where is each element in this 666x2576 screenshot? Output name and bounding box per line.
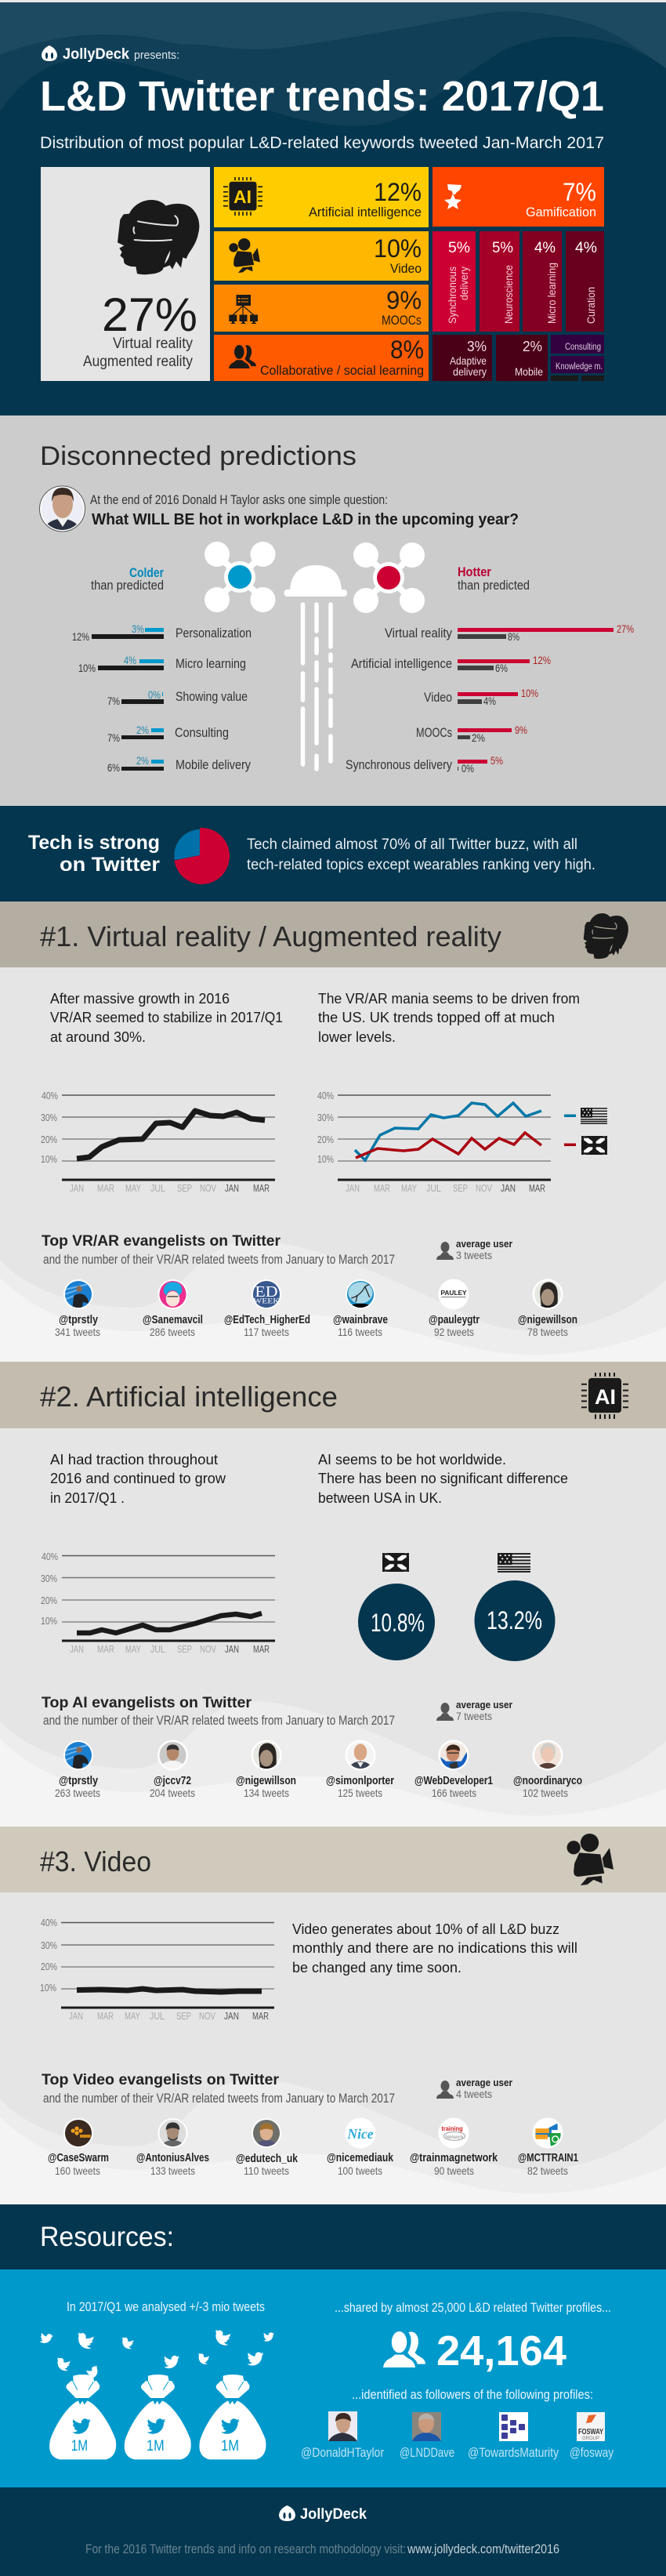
tile: knowledge management: Knowledge m. [556,362,603,372]
evangelist row: @pauleygtr [429,1314,480,1326]
tile: consulting: Consulting [565,343,601,352]
tile: curation 4% [566,231,604,332]
line chart: AI overall: 40% [42,1551,58,1562]
evangelist row: 117 tweets [244,1326,289,1338]
evangelist row: 92 tweets [434,1326,474,1338]
row: synchronous delivery: Synchronous delivery [346,757,452,772]
evangelist row: @noordinaryco [513,1775,582,1787]
line chart: video overall: MAY [125,2010,140,2022]
evangelist row: 78 tweets [527,1326,568,1338]
row: showing value: Showing value [176,689,248,704]
bag two [125,2375,191,2459]
line chart: VR/AR US vs UK: JUL [426,1182,441,1194]
line chart: VR/AR overall: 20% [41,1134,57,1145]
line chart: VR/AR overall: MAY [125,1182,141,1194]
text: video note: be changed any time soon. [292,1959,461,1976]
evangelist row: @nigewillson [518,1314,577,1326]
tile: gamification 7%: 7% [563,178,596,206]
heading: top AI evangelists: Top AI evangelists on Twitter [42,1695,252,1711]
row: showing value: 7% [107,695,120,707]
line chart: VR/AR overall: 40% [42,1090,58,1101]
icon: flying twitter birds [39,2329,274,2379]
row: micro learning: Micro learning [176,656,246,671]
line chart: video overall: NOV [199,2010,215,2022]
line chart: video overall: MAR [252,2010,269,2022]
row: micro learning: 10% [78,662,96,674]
bubble: US 13.2% [475,1580,555,1661]
bag two: 1M [147,2438,165,2454]
row: mobile delivery: 2% [136,755,149,767]
bubble: UK 10.8%: 10.8% [371,1609,425,1637]
key question: What WILL BE hot in workplace L&D in the upcoming year? [92,510,519,528]
line chart: AI overall: NOV [200,1643,216,1655]
tile: synchronous delivery 5%: Synchronous [446,267,458,324]
profile: LNDDave [400,2412,454,2460]
icon: cloud dome with rain [284,565,347,769]
evangelist row: 134 tweets [244,1787,289,1799]
row: consulting [107,724,229,744]
bag one: 1M [71,2438,88,2454]
row: personalization [72,623,252,643]
subtitle: Distribution of most popular L&D-related keywords tweeted Jan-March 2017 [40,134,604,152]
section header band: #2. Artificial intelligence [40,1381,338,1413]
row: artificial intelligence: 12% [533,655,551,666]
evangelist row: @edutech_uk [236,2153,299,2165]
evangelist row: 263 tweets [55,1787,100,1799]
text: worldwide note: There has been no significant difference [318,1470,568,1486]
text: growth note: VR/AR seemed to stabilize in 2017/Q1 [50,1009,283,1025]
bubble: UK 10.8% [358,1584,435,1660]
row: synchronous delivery [346,755,503,775]
subheading: and the number of their VR/AR related tweets from January to March 2017 [43,1714,395,1728]
tile: collaborative / social learning 8%: 8% [390,336,424,364]
line chart: AI overall: JUL [150,1643,165,1655]
tile: adaptive delivery 3% [433,335,492,381]
tile: mobile 2%: Mobile [515,366,543,378]
tile: collaborative / social learning 8% [214,335,429,381]
row: consulting: 2% [136,724,149,736]
logo: JollyDeck presents: presents: [134,49,179,62]
evangelist row: @MCTTRAIN1 [518,2152,578,2164]
tile: virtual reality 27% [41,167,210,381]
text: growth note: After massive growth in 2016 [50,990,230,1007]
text: identified followers: ...identified as followers of the following profiles: [352,2387,593,2402]
tile: virtual reality 27%: Virtual reality [113,336,193,352]
tile: MOOCs 9% [214,285,429,332]
evangelist row: @nigewillson [236,1775,296,1787]
tile: knowledge management [551,356,604,373]
line chart: video overall: 10% [40,1983,56,1994]
text: growth note: at around 30%. [50,1029,146,1045]
row: mobile delivery [107,755,251,774]
legend: colder: Colder [129,565,164,580]
tile: mobile 2% [496,335,548,381]
evangelist row: @jccv72 [154,1775,191,1787]
section header band: AI [595,1385,616,1409]
text: US driven note [318,990,580,1045]
callout: average user: 4 tweets [456,2088,492,2100]
row: video: 4% [483,695,496,707]
callout: average user: 3 tweets [456,1250,492,1261]
tile: consulting [551,335,604,354]
evangelist row: 204 tweets [150,1787,195,1799]
row: personalization: 12% [72,631,89,643]
row: virtual reality: Virtual reality [385,626,452,640]
bag three [199,2375,266,2459]
row: personalization: Personalization [176,626,252,640]
row: micro learning [78,655,246,674]
text: methodology link: For the 2016 Twitter trends and info on research mothodology visit: [85,2542,406,2556]
line chart: video overall: 20% [41,1961,57,1972]
text: US driven note: the US. UK trends topped off at much [318,1009,555,1025]
legend: hotter: Hotter [458,564,491,579]
bubble: US 13.2%: 13.2% [487,1606,542,1634]
subheading: and the number of their VR/AR related tweets from January to March 2017 [43,2092,395,2106]
tile: gamification 7%: Gamification [526,205,596,220]
row: consulting: 7% [107,732,120,744]
text: worldwide note [318,1451,568,1506]
logo: JollyDeck presents [42,45,179,63]
line chart: VR/AR overall: MAR [97,1182,114,1194]
subheading: and the number of their VR/AR related tweets from January to March 2017 [43,1253,395,1267]
tile: synchronous delivery 5%: delivery [458,267,470,300]
text: traction note [50,1451,226,1506]
line chart: video overall: JAN [69,2010,83,2022]
line chart: video overall: MAR [97,2010,114,2022]
logo: JollyDeck: JollyDeck [300,2506,367,2523]
flags: UK and US [382,1553,530,1572]
callout: average user [436,1238,512,1261]
callout: average user [436,2077,512,2100]
section: #1 virtual reality [0,902,666,1372]
section header band [0,1827,666,1892]
line chart: AI overall: 30% [41,1573,57,1584]
evangelist row: 133 tweets [150,2164,195,2177]
tile: MOOCs 9%: MOOCs [382,313,422,328]
evangelist row: @AntoniusAlves [136,2152,209,2164]
row: MOOCs: 9% [515,724,527,736]
legend: colder [91,565,164,593]
line chart: VR/AR US vs UK: MAR [374,1182,390,1194]
row: synchronous delivery: 5% [490,755,503,767]
line chart: VR/AR overall: 10% [41,1154,57,1165]
heading: on Twitter [60,854,160,876]
text: shared by profiles: ...shared by almost 25,000 L&D related Twitter profiles... [335,2300,611,2315]
line chart: VR/AR US vs UK: 10% [317,1154,334,1165]
row: mobile delivery: 6% [107,762,120,774]
line chart: VR/AR overall: MAR [253,1182,270,1194]
heading: top VR/AR evangelists: Top VR/AR evangelists on Twitter [42,1233,281,1250]
text: traction note: 2016 and continued to grow [50,1470,226,1486]
text: video note [292,1921,577,1976]
tile: synchronous delivery 5% [433,231,476,332]
evangelist row: 90 tweets [434,2164,474,2177]
icon: blue cold drone [205,542,276,612]
line chart: VR/AR overall: JUL [150,1182,165,1194]
panel: disconnected predictions [0,415,666,806]
line chart: VR/AR US vs UK: MAY [401,1182,417,1194]
profile: LNDDave: @LNDDave [400,2445,454,2460]
line chart: AI overall: MAY [125,1643,141,1655]
line chart: VR/AR overall: JAN [225,1182,239,1194]
callout: average user: average user [456,1699,512,1711]
text block [247,836,595,873]
evangelist row: 82 tweets [527,2164,568,2177]
line chart: AI overall: JAN [225,1643,239,1655]
legend: hotter [458,564,530,593]
tile: gamification 7% [433,167,604,227]
profile: fosway: @fosway [570,2445,614,2460]
row: video: 10% [521,688,538,699]
callout: average user [436,1699,512,1722]
profile: fosway [570,2412,614,2460]
bar chart: hotter than predicted [346,623,634,775]
tile: adaptive delivery 3%: 3% [467,339,487,354]
line chart: VR/AR US vs UK: 20% [317,1134,334,1145]
icon: red hot drone [353,542,425,613]
section header band [0,902,666,967]
tile: adaptive delivery 3%: Adaptive [450,355,487,367]
line chart: video overall: JUL [150,2010,165,2022]
tile: artificial intelligence 12% [214,167,429,227]
bag three: 1M [221,2438,239,2454]
evangelist row: 110 tweets [244,2164,289,2177]
evangelist row: 102 tweets [523,1787,568,1799]
line chart: VR/AR US vs UK: 40% [317,1090,334,1101]
tile: virtual reality 27%: 27% [102,288,197,341]
evangelist row: @CaseSwarm [48,2152,109,2164]
heading: Resources: [40,2222,174,2252]
profile: fosway: GROUP [582,2436,599,2441]
tile: video 10%: 10% [374,234,422,263]
portrait: Donald H Taylor [39,486,86,533]
evangelist row: @trainmagnetwork [410,2152,498,2164]
line chart: AI overall: 20% [41,1595,57,1606]
evangelist row [55,1740,582,1799]
title: L&D Twitter trends: 2017/Q1 [40,73,604,120]
pie chart [172,827,230,884]
tile: curation 4%: Curation [585,287,597,324]
text: worldwide note: AI seems to be hot worldwide. [318,1451,506,1468]
tile: video 10% [214,231,429,281]
evangelist row: @simonlporter [326,1775,394,1787]
line chart: VR/AR overall: SEP [177,1182,192,1194]
line chart: VR/AR US vs UK: 30% [317,1112,334,1123]
row: virtual reality [385,623,634,643]
section header band: #1. Virtual reality / Augmented reality [40,920,501,952]
evangelist row: @tprstly [59,1314,98,1326]
text: traction note: AI had traction throughout [50,1451,218,1468]
line chart: AI overall: MAR [97,1643,114,1655]
line chart: AI overall: 10% [41,1616,57,1627]
tile: adaptive delivery 3%: delivery [453,366,487,378]
tile: artificial intelligence 12%: AI [233,187,252,207]
line chart: video overall: SEP [176,2010,191,2022]
row: video: Video [424,690,452,705]
panel: tech is strong on Twitter [0,806,666,902]
tile: video 10%: Video [390,261,422,276]
bag one [49,2375,116,2459]
tile: neuroscience 5% [480,231,519,332]
tile: virtual reality 27%: Augmented reality [83,354,193,370]
line chart: VR/AR US vs UK [317,1090,551,1194]
tile: MOOCs 9%: 9% [386,286,422,314]
legend: US and UK flags [564,1108,607,1155]
profile: TowardsMaturity [468,2412,559,2460]
line chart: video overall: JAN [224,2010,239,2022]
evangelist row: @WebDeveloper1 [414,1775,493,1787]
evangelist row: @EdTech_HigherEd [224,1314,310,1326]
line chart: VR/AR overall: JAN [70,1182,84,1194]
row: personalization: 3% [132,623,144,635]
row: artificial intelligence: 6% [495,662,508,674]
tile: micro learning 4%: Micro learning [545,263,558,324]
legend: colder: than predicted [91,578,164,593]
line chart: video overall: 40% [41,1917,57,1928]
tile: synchronous delivery 5%: 5% [448,240,470,256]
heading: Disconnected predictions [40,441,357,471]
row: showing value: 0% [148,689,161,701]
line chart: AI overall: SEP [177,1643,192,1655]
panel: footer [0,2487,666,2576]
tile: micro learning 4% [523,231,562,332]
row: showing value [107,689,248,707]
row: micro learning: 4% [124,655,136,666]
logo: JollyDeck presents: JollyDeck [63,46,129,63]
line chart: VR/AR US vs UK: MAR [529,1182,545,1194]
line chart: VR/AR overall: NOV [200,1182,216,1194]
text block: Tech claimed almost 70% of all Twitter buzz, with all [247,836,577,853]
text: traction note: in 2017/Q1 . [50,1489,125,1506]
callout: average user: average user [456,2077,512,2088]
icon: money bags of tweets [49,2375,266,2459]
intro text: At the end of 2016 Donald H Taylor asks one simple question: [90,492,388,507]
line chart: AI overall [41,1551,275,1655]
text: video note: monthly and there are no indications this will [292,1939,577,1956]
tile: collaborative / social learning 8%: Collaborative / social learning [260,363,424,378]
evangelist row: 166 tweets [432,1787,476,1799]
row: artificial intelligence: Artificial intelligence [351,656,452,671]
evangelist row: 116 tweets [338,1326,382,1338]
tile: artificial intelligence 12%: 12% [374,178,422,206]
tile: micro learning 4%: 4% [534,240,556,256]
text: methodology link: www.jollydeck.com/twitter2016 [407,2542,559,2556]
tile: neuroscience 5%: 5% [492,240,513,256]
row: MOOCs: 2% [472,732,485,744]
row: MOOCs: MOOCs [416,725,452,740]
heading: Tech is strong [28,832,160,854]
line chart: VR/AR US vs UK: JAN [501,1182,516,1194]
text: analysed tweets: In 2017/Q1 we analysed +/-3 mio tweets [67,2299,265,2314]
stat: 24,164 profiles: 24,164 [436,2327,566,2375]
heading [28,832,160,876]
line chart: video overall [40,1917,274,2022]
line chart: VR/AR overall: 30% [41,1112,57,1123]
text: worldwide note: between USA in UK. [318,1489,442,1506]
panel: top header [0,0,666,415]
bar chart: colder than predicted [72,623,252,774]
evangelist row: 341 tweets [55,1326,100,1338]
tile: neuroscience 5%: Neuroscience [502,265,515,324]
row: virtual reality: 27% [617,623,634,635]
tile: curation 4%: 4% [575,240,597,256]
section: #3 video [0,1827,666,2211]
text block: tech-related topics except wearables ranking very high. [247,857,595,873]
heading: top video evangelists: Top Video evangelists on Twitter [42,2072,280,2088]
line chart: VR/AR overall [41,1090,275,1194]
evangelist row: @Sanemavcil [143,1314,203,1326]
section header band [0,1362,666,1428]
line chart: VR/AR US vs UK: SEP [453,1182,468,1194]
text: growth note [50,990,283,1045]
line chart: AI overall: JAN [70,1643,84,1655]
evangelist row: @nicemediauk [327,2152,394,2164]
line chart: VR/AR US vs UK: NOV [476,1182,492,1194]
row: virtual reality: 8% [508,631,519,643]
line chart: AI overall: MAR [253,1643,270,1655]
text: video note: Video generates about 10% of all L&D buzz [292,1921,559,1937]
row: MOOCs [416,724,527,744]
legend: hotter: than predicted [458,578,530,593]
evangelist row: 160 tweets [55,2164,100,2177]
profile: DonaldHTaylor: @DonaldHTaylor [301,2445,384,2460]
evangelist row: @wainbrave [333,1314,388,1326]
callout: average user: 7 tweets [456,1711,492,1722]
evangelist row: 100 tweets [338,2164,382,2177]
tile: artificial intelligence 12%: Artificial intelligence [309,205,422,220]
line chart: video overall: 30% [41,1940,57,1951]
row: video [424,688,538,707]
treemap of keywords [41,167,604,381]
evangelist row: @tprstly [59,1775,98,1787]
profile: fosway: FOSWAY [578,2428,603,2436]
text: US driven note: The VR/AR mania seems to be driven from [318,990,580,1007]
evangelist row [55,1279,577,1338]
evangelist row: 286 tweets [150,1326,195,1338]
text: US driven note: lower levels. [318,1029,396,1045]
tile: mobile 2%: 2% [523,339,542,354]
profile: DonaldHTaylor [301,2411,384,2460]
row: artificial intelligence [351,655,551,674]
row: mobile delivery: Mobile delivery [176,757,251,772]
section header band: #3. Video [40,1845,151,1878]
line chart: VR/AR US vs UK: JAN [346,1182,360,1194]
evangelist row: 125 tweets [338,1787,382,1799]
row: synchronous delivery: 0% [461,763,474,775]
row: consulting: Consulting [175,725,229,740]
callout: average user: average user [456,1238,512,1250]
section: #2 artificial intelligence [0,1362,666,1833]
evangelist row [48,2118,578,2177]
profile: TowardsMaturity: @TowardsMaturity [468,2445,559,2460]
panel: resources [0,2204,666,2487]
